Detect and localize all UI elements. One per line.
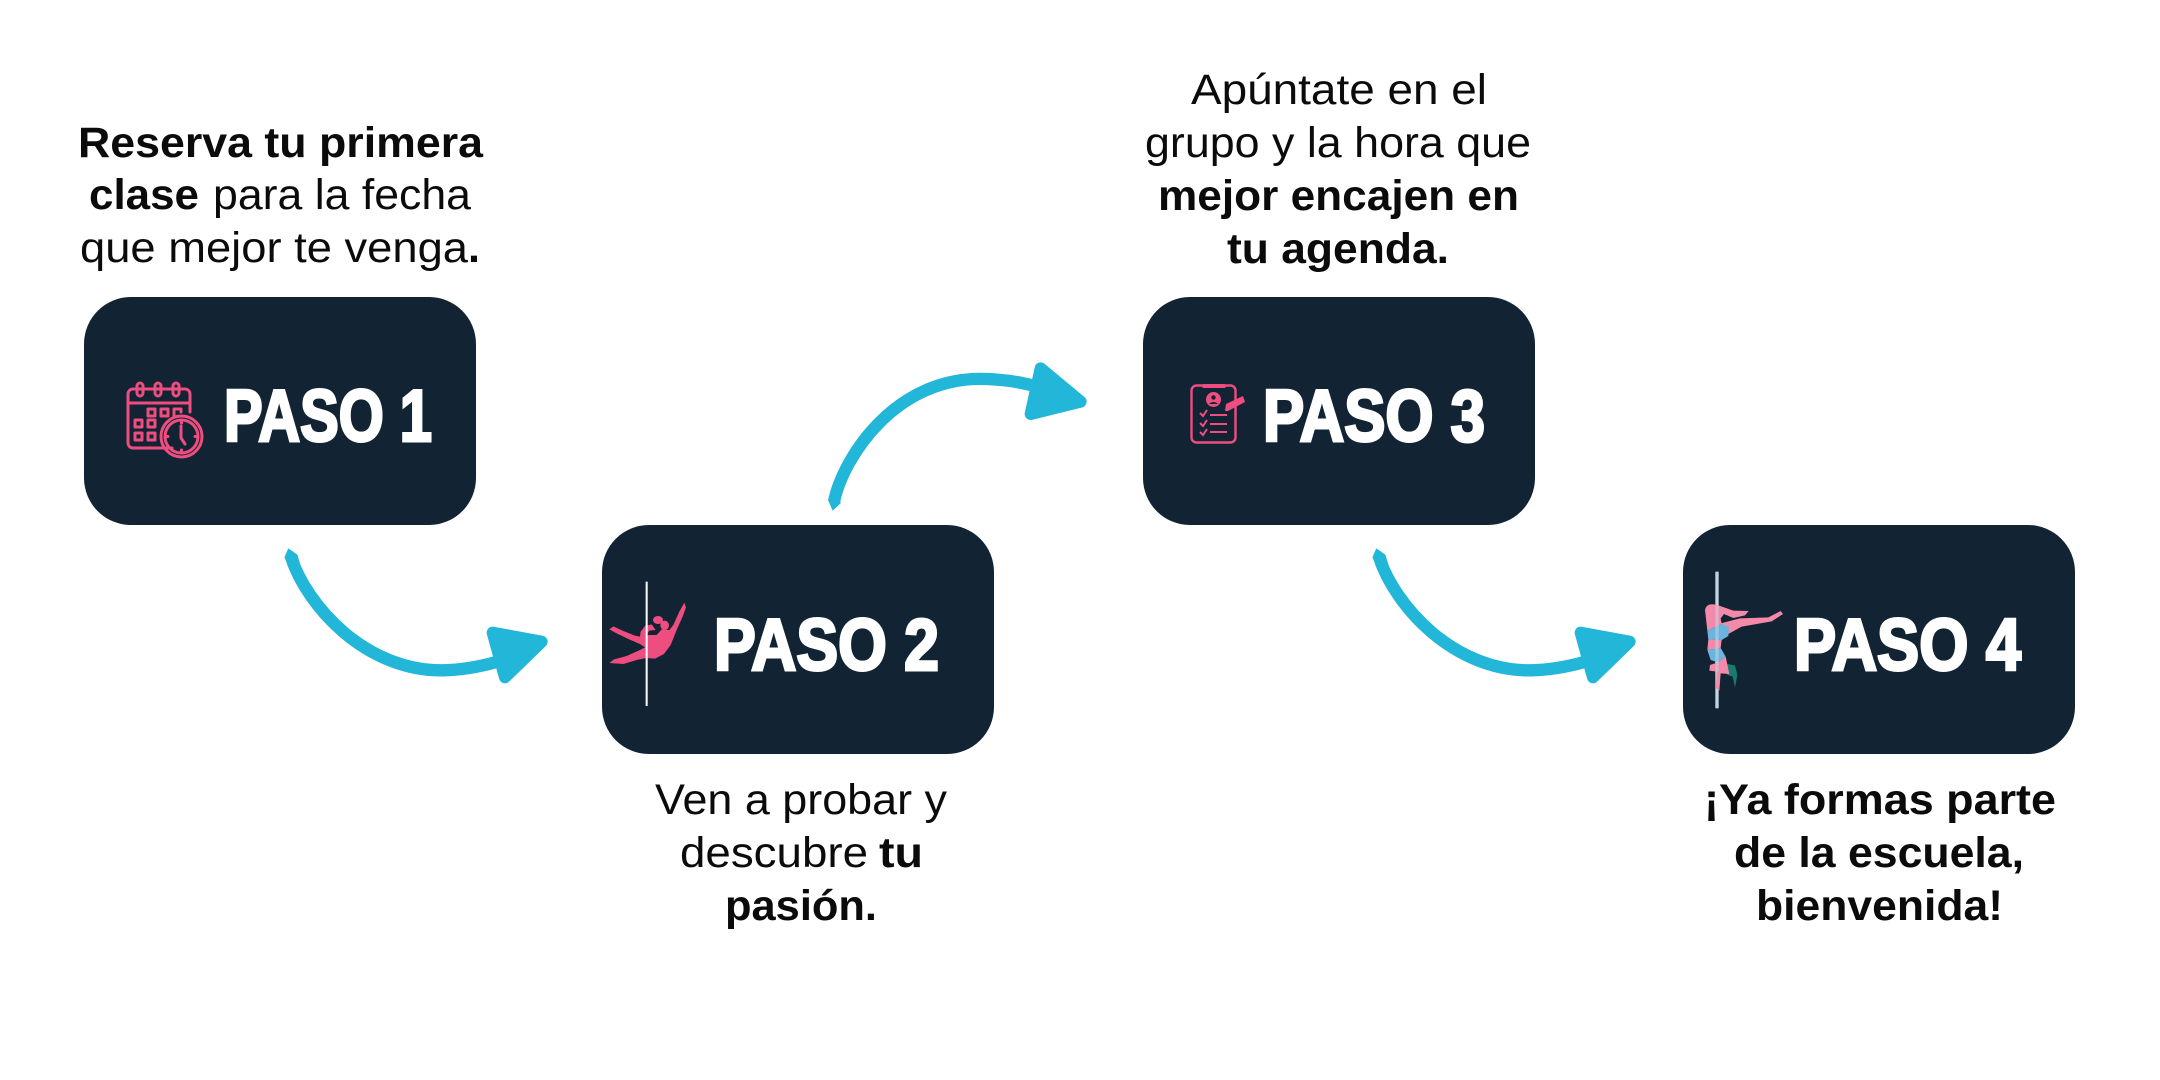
panel: PASO 2 bbox=[602, 525, 994, 754]
text block: step 3 description bbox=[1145, 66, 1531, 273]
text block: step 4 description: de la escuela, bbox=[1734, 829, 2024, 877]
icon: clipboard checklist with pencil bbox=[1192, 384, 1245, 442]
text block: step 1 description: clase bbox=[89, 171, 199, 219]
text block: step 2 description: descubre bbox=[680, 829, 868, 877]
text block: step 2 description: tu bbox=[879, 829, 923, 877]
icon: dancer on pole silhouette bbox=[609, 582, 686, 706]
text block: step 4 description: bienvenida! bbox=[1756, 882, 2003, 930]
text block: step 2 description bbox=[655, 776, 948, 930]
panel: PASO 1 bbox=[84, 297, 476, 525]
text block: step 1 description: Reserva tu primera bbox=[78, 119, 484, 167]
icon: calendar with clock bbox=[128, 383, 202, 457]
text block: step 3 description: grupo y la hora que bbox=[1145, 119, 1531, 167]
text block: step 2 description: Ven a probar y bbox=[655, 776, 948, 824]
heading: PASO 4: PASO 4 bbox=[1794, 605, 2021, 686]
heading: PASO 2: PASO 2 bbox=[714, 605, 939, 686]
text block: step 3 description: Apúntate en el bbox=[1191, 66, 1487, 114]
text block: step 1 description: . bbox=[468, 224, 480, 272]
text block: step 1 description bbox=[78, 119, 484, 272]
text block: step 4 description bbox=[1704, 776, 2056, 930]
arrow: step 1 to step 2 bbox=[284, 548, 542, 677]
text block: step 1 description: que mejor te venga bbox=[80, 224, 468, 272]
text block: step 1 description: para la fecha bbox=[213, 171, 471, 219]
panel: PASO 3 bbox=[1143, 297, 1535, 525]
heading: PASO 1: PASO 1 bbox=[224, 376, 432, 457]
text block: step 3 description: tu agenda. bbox=[1227, 225, 1449, 273]
text block: step 3 description: mejor encajen en bbox=[1158, 172, 1519, 220]
panel: PASO 4 bbox=[1683, 525, 2075, 754]
icon: inverted pole dancer bbox=[1705, 572, 1783, 708]
heading: PASO 3: PASO 3 bbox=[1263, 376, 1485, 457]
arrow: step 3 to step 4 bbox=[1372, 548, 1630, 677]
text block: step 2 description: pasión. bbox=[725, 882, 877, 930]
arrow: step 2 to step 3 bbox=[828, 368, 1081, 511]
text block: step 4 description: ¡Ya formas parte bbox=[1704, 776, 2056, 824]
